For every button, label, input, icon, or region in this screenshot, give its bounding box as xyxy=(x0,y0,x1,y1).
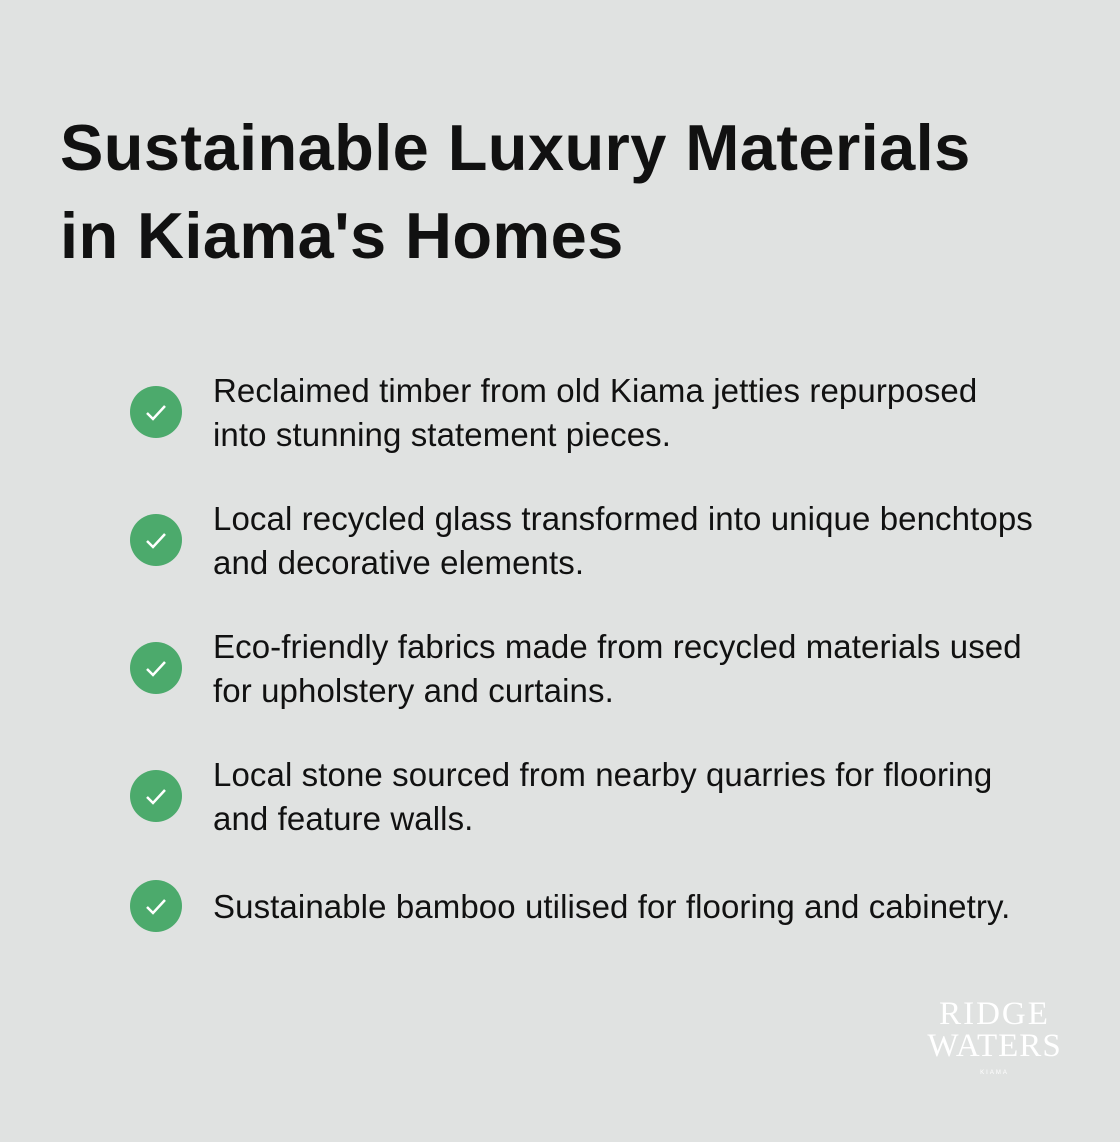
text 5: Sustainable bamboo utilised for flooring and cabinetry. xyxy=(213,888,1010,925)
item 2 xyxy=(130,500,1033,581)
text 2 xyxy=(213,500,1033,581)
text 2: Local recycled glass transformed into unique benchtops xyxy=(213,500,1033,537)
text 1: into stunning statement pieces. xyxy=(213,416,671,453)
text 4: Local stone sourced from nearby quarries for flooring xyxy=(213,756,992,793)
icon: check 3 xyxy=(130,642,182,694)
item 5 xyxy=(130,880,1010,932)
title xyxy=(60,111,971,272)
text 3: for upholstery and curtains. xyxy=(213,672,614,709)
icon: check 5 xyxy=(130,880,182,932)
text 2: and decorative elements. xyxy=(213,544,584,581)
item 3 xyxy=(130,628,1022,709)
logo: RIDGE xyxy=(939,996,1050,1032)
text 4: and feature walls. xyxy=(213,800,473,837)
icon: check 1 xyxy=(130,386,182,438)
item 4 xyxy=(130,756,992,837)
logo: WATERS xyxy=(927,1028,1062,1064)
item 1 xyxy=(130,372,977,453)
text 4 xyxy=(213,756,992,837)
logo: KIAMA xyxy=(980,1070,1009,1076)
title: Sustainable Luxury Materials xyxy=(60,111,971,184)
icon: check 2 xyxy=(130,514,182,566)
text 3 xyxy=(213,628,1022,709)
title: in Kiama's Homes xyxy=(60,199,624,272)
text 1 xyxy=(213,372,977,453)
text 3: Eco-friendly fabrics made from recycled materials used xyxy=(213,628,1022,665)
text 1: Reclaimed timber from old Kiama jetties repurposed xyxy=(213,372,977,409)
logo xyxy=(927,996,1062,1076)
icon: check 4 xyxy=(130,770,182,822)
